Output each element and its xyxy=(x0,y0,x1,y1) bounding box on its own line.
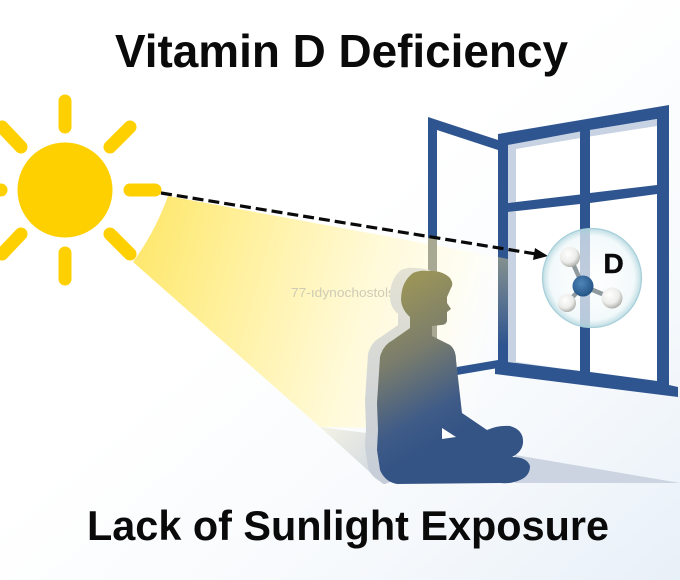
window glass xyxy=(508,120,658,381)
letter D: D xyxy=(604,248,624,279)
gap between arm and leg xyxy=(442,428,456,439)
window inner reveal xyxy=(508,120,657,384)
hydrogen atoms xyxy=(560,247,580,267)
bubble xyxy=(542,228,642,328)
title: Vitamin D Deficiency xyxy=(115,25,568,77)
watermark text: 77-ıdynochostolsε xyxy=(291,285,401,300)
molecule bonds xyxy=(567,257,612,303)
sun disc xyxy=(18,142,112,238)
main frame washed by sunlight xyxy=(498,257,508,345)
floor shadow left xyxy=(320,427,386,484)
sun rays xyxy=(0,101,155,279)
window xyxy=(428,105,678,397)
top and left inner reveal xyxy=(508,119,657,363)
sun icon xyxy=(0,101,155,279)
casement washed by sunlight xyxy=(428,238,437,348)
sunlight beam xyxy=(133,196,510,430)
person shadow xyxy=(365,268,448,484)
bottom caption: Lack of Sunlight Exposure xyxy=(87,502,609,549)
main frame xyxy=(495,105,678,397)
floor shadow right xyxy=(515,455,680,483)
central atom xyxy=(572,276,594,296)
person silhouette xyxy=(377,271,530,484)
open casement xyxy=(428,117,498,375)
vitamin D molecule bubble xyxy=(542,228,642,328)
dashed arrow xyxy=(161,193,548,260)
